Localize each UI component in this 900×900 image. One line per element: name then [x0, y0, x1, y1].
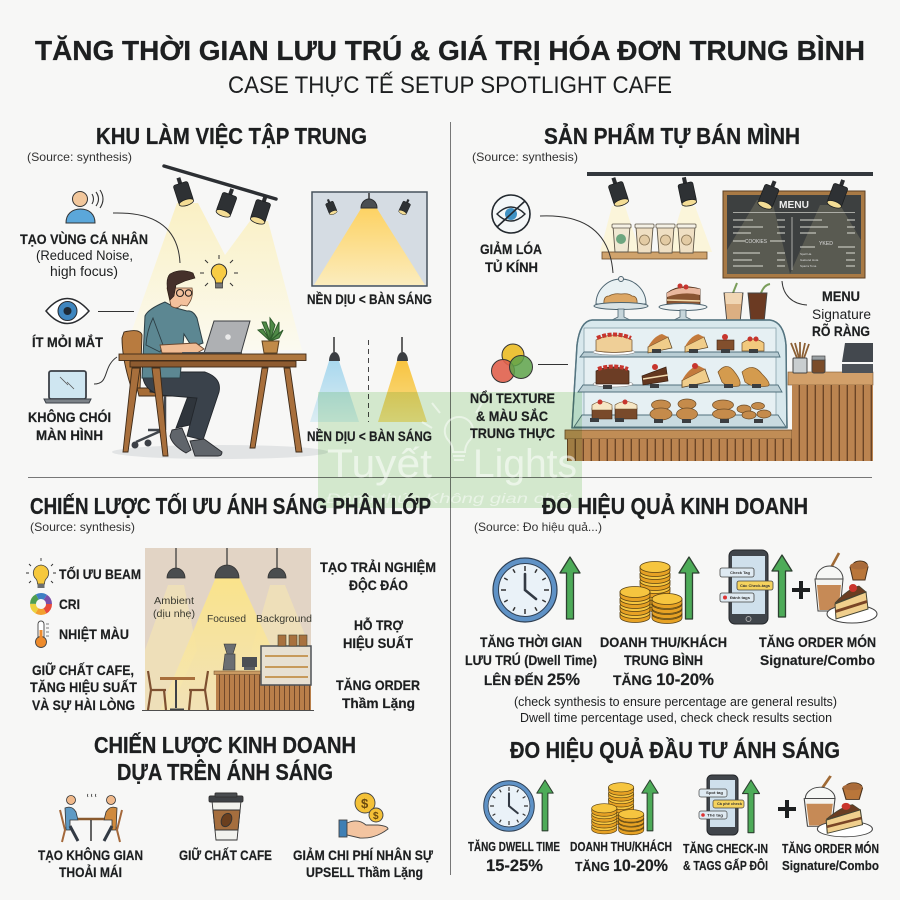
label: order món small [782, 841, 879, 873]
label: check-in: & TAGS GẤP ĐÔI [683, 858, 768, 873]
label: order món small: TĂNG ORDER MÓN [782, 841, 879, 856]
labels: strategy: TẠO KHÔNG GIAN [38, 846, 143, 863]
label: doanh thu small [570, 839, 672, 875]
connector: personal zone [113, 213, 180, 263]
connector: no glare [540, 216, 613, 273]
heading: chiến lược tối ưu: CHIẾN LƯỢC TỐI ƯU ÁNH SÁNG PHÂN LỚP [30, 492, 431, 519]
note: (check synthesis to ensure percentage are general results) [514, 695, 837, 709]
note: Dwell time percentage used, check check results section [520, 711, 832, 725]
icon: light bulb [200, 255, 238, 288]
label: menu: MENU [822, 288, 860, 304]
potted plant [258, 318, 283, 353]
menu board: MENU [779, 200, 809, 211]
icon: clock small [484, 781, 534, 831]
panel: đo hiệu quả kinh doanh [465, 520, 879, 875]
shelf 2 pastries [593, 363, 769, 389]
diagram: bright table dim background [312, 192, 427, 286]
watermark: Lights [473, 442, 577, 486]
watermark: Tuyết [327, 442, 432, 486]
floor shadow [112, 445, 328, 459]
heading: chiến lược kinh doanh: CHIẾN LƯỢC KINH DOANH [94, 731, 356, 758]
label: cri: CRI [59, 596, 80, 612]
right labels [320, 558, 436, 711]
right labels: HỖ TRỢ [354, 616, 403, 633]
label: doanh thu [600, 634, 727, 689]
label: thời gian lưu trú: LƯU TRÚ (Dwell Time) [465, 651, 597, 668]
label: giảm lóa tủ kính [480, 240, 542, 275]
source note: (Source: synthesis) [472, 150, 578, 164]
icon: drink and cake [815, 553, 877, 623]
label: nhiệt màu: NHIỆT MÀU [59, 625, 129, 642]
bar counter [214, 635, 311, 710]
label: doanh thu: TĂNG 10-20% [613, 670, 714, 689]
label: nổi texture: TRUNG THỰC [470, 425, 555, 441]
source note: (Source: synthesis) [30, 520, 135, 534]
panel: chiến lược phân lớp [26, 520, 436, 880]
connector: laptop [94, 357, 117, 384]
heading: đo hiệu quả kinh doanh: ĐO HIỆU QUẢ KINH DOANH [542, 491, 808, 519]
icon: laptop [44, 371, 91, 403]
arrow up [679, 557, 699, 619]
plus sign [778, 800, 796, 818]
label: tạo vùng cá nhân: high focus) [50, 264, 118, 279]
label: nền dịu 2: NỀN DỊU < BÀN SÁNG [307, 428, 432, 444]
icon: phone small: Cà phê check [717, 801, 743, 806]
label: order món: Signature/Combo [760, 652, 875, 668]
person at desk [119, 271, 306, 456]
label: thời gian lưu trú: TĂNG THỜI GIAN [480, 633, 582, 650]
icon: no glare [492, 195, 530, 233]
arrow up [537, 780, 553, 831]
heading: KHU LÀM VIỆC TẬP TRUNG [96, 122, 367, 149]
icon: phone with tags: Các Check-tags [740, 583, 771, 588]
counter base [565, 430, 792, 461]
label: nổi texture: NỔI TEXTURE [470, 389, 555, 406]
note [514, 695, 837, 725]
label: check-in [683, 841, 768, 873]
source note: (Source: Đo hiệu quả...) [474, 520, 602, 534]
icon: thermometer [36, 621, 49, 648]
side counter [788, 342, 873, 461]
label: thời gian lưu trú: LÊN ĐẾN 25% [484, 670, 580, 689]
label: doanh thu small: TĂNG 10-20% [575, 856, 668, 875]
head [167, 271, 195, 308]
right labels: ĐỘC ĐÁO [349, 576, 408, 593]
icon: phone small: Thẻ tag [707, 812, 724, 818]
menu board: YKED [819, 241, 833, 247]
connector: menu [782, 281, 807, 305]
torso [142, 302, 203, 378]
icon: colour venn [492, 344, 532, 382]
label: không chói màn hình: MÀN HÌNH [36, 427, 103, 443]
label: giảm lóa tủ kính: GIẢM LÓA [480, 240, 542, 257]
icon: coffee cup [209, 793, 243, 840]
label: check-in: TĂNG CHECK-IN [683, 841, 768, 856]
text: giữ chất cafe: TĂNG HIỆU SUẤT [30, 678, 137, 695]
label: dwell time [468, 839, 560, 875]
icon: phone small: Spot tag [706, 790, 724, 795]
heading: đầu tư ánh sáng: ĐO HIỆU QUẢ ĐẦU TƯ ÁNH SÁNG [510, 735, 840, 763]
icon: phone with tags [720, 550, 773, 624]
icon: people at table [60, 794, 122, 842]
label: tạo vùng cá nhân: (Reduced Noise, [36, 248, 133, 263]
register [842, 343, 873, 373]
icon: clock [493, 558, 557, 622]
arrow up [642, 780, 658, 831]
desk [119, 354, 306, 456]
text: giữ chất cafe: GIỮ CHẤT CAFE, [32, 661, 134, 678]
label: tạo vùng cá nhân [20, 230, 148, 279]
panel: sản phẩm tự bán mình [472, 121, 873, 461]
icon: phone small [699, 775, 744, 835]
label: không chói màn hình: KHÔNG CHÓI [28, 408, 111, 425]
label: thời gian lưu trú [465, 633, 597, 689]
right labels: Thầm Lặng [342, 695, 415, 711]
icon: drink and cake small [804, 776, 872, 837]
plus sign [792, 581, 810, 599]
layered lighting scene [142, 548, 314, 710]
scene labels: Background [256, 613, 312, 625]
menu board [723, 191, 865, 278]
right labels: TẠO TRẢI NGHIỆM [320, 558, 436, 575]
scene labels: Ambient [154, 595, 194, 607]
label: tối ưu beam: TỐI ƯU BEAM [59, 565, 141, 582]
label: doanh thu small: DOANH THU/KHÁCH [570, 839, 672, 854]
icon: hand with coins: $ [373, 811, 379, 822]
right labels: TĂNG ORDER [336, 677, 420, 693]
menu board: Sparra Tona [800, 264, 817, 268]
title: TĂNG THỜI GIAN LƯU TRÚ & GIÁ TRỊ HÓA ĐƠN TRUNG BÌNH [35, 35, 865, 66]
text: giữ chất cafe [30, 661, 137, 713]
label: order món: TĂNG ORDER MÓN [759, 633, 876, 650]
label: không chói màn hình [28, 408, 111, 443]
label: order món small: Signature/Combo [782, 858, 879, 873]
scene labels: Focused [207, 613, 246, 625]
icon: personal zone [66, 190, 103, 223]
beams [145, 577, 311, 710]
label: menu: RÕ RÀNG [812, 322, 870, 339]
track light [164, 166, 276, 226]
shelf 3 pastries [590, 399, 771, 423]
arrow up [742, 780, 760, 833]
pendants [167, 548, 286, 578]
label: nổi texture: & MÀU SẮC [476, 407, 548, 424]
labels: strategy [38, 846, 433, 880]
arrow up [560, 557, 580, 619]
utensil cup and jar [791, 342, 825, 373]
subtitle: CASE THỰC TẾ SETUP SPOTLIGHT CAFE [228, 71, 672, 99]
shelf with cups [602, 224, 707, 259]
source note: (Source: synthesis) [27, 150, 132, 164]
scene labels: (dịu nhẹ) [153, 608, 195, 620]
watermark: Đánh thức Không gian chất [326, 490, 574, 506]
arrow up [772, 555, 792, 617]
label: tạo vùng cá nhân: TẠO VÙNG CÁ NHÂN [20, 230, 148, 247]
heading: chiến lược kinh doanh: DỰA TRÊN ÁNH SÁNG [117, 758, 333, 785]
icon: colour wheel [33, 596, 49, 612]
right labels: HIỆU SUẤT [343, 634, 413, 651]
icon: coins small [592, 783, 644, 835]
connector: eye [98, 310, 134, 312]
label: nổi texture [470, 389, 555, 441]
light beams [600, 206, 712, 252]
icon: beam bulb [26, 558, 56, 588]
label: ít mỏi mắt: ÍT MỎI MẮT [32, 333, 103, 350]
icon: coins [620, 562, 682, 624]
label: order món [759, 633, 876, 668]
menu board: Spell Ha [800, 252, 812, 256]
icon: hand with coins: $ [361, 796, 369, 811]
arm [146, 318, 163, 352]
laptop [182, 321, 250, 354]
chair [122, 331, 178, 448]
icon: hand with coins [339, 793, 388, 838]
icon: phone with tags: Đánh tags [730, 595, 751, 600]
label: dwell time: TĂNG DWELL TIME [468, 839, 560, 854]
display case [572, 320, 787, 428]
menu board: Galoutel Huta [800, 258, 819, 262]
icon: phone with tags: Check Tag [730, 570, 751, 575]
label: doanh thu: DOANH THU/KHÁCH [600, 634, 727, 650]
text: giữ chất cafe: VÀ SỰ HÀI LÒNG [32, 696, 135, 713]
label: dwell time: 15-25% [486, 856, 543, 875]
heading: chiến lược kinh doanh [94, 731, 356, 785]
labels: strategy: THOẢI MÁI [59, 864, 122, 880]
labels: strategy: GIỮ CHẤT CAFE [179, 846, 272, 863]
track light [587, 172, 873, 211]
table and chairs [148, 671, 208, 710]
connector: venn [538, 364, 568, 366]
shelf 1 pastries [593, 334, 764, 355]
legs [143, 372, 222, 456]
scene labels [153, 595, 312, 625]
label: nền dịu 1: NỀN DỊU < BÀN SÁNG [307, 291, 432, 307]
watermark [318, 392, 582, 508]
label: menu [812, 288, 871, 339]
icon: eye [46, 298, 89, 324]
panel: khu làm việc tập trung [20, 122, 432, 459]
menu board: COOKIES [745, 239, 768, 245]
labels: strategy: UPSELL Thầm Lặng [306, 864, 423, 880]
heading: SẢN PHẨM TỰ BÁN MÌNH [544, 121, 800, 149]
light beams [125, 203, 302, 350]
label: giảm lóa tủ kính: TỦ KÍNH [485, 258, 538, 275]
diagram: cool and warm pendants [310, 337, 427, 422]
dome cake stand [594, 276, 648, 320]
label: menu: Signature [812, 307, 871, 322]
label: doanh thu: TRUNG BÌNH [624, 652, 703, 668]
labels: strategy: GIẢM CHI PHÍ NHÂN SỰ [293, 846, 433, 863]
cake stand [659, 284, 707, 320]
iced drinks [724, 283, 770, 323]
